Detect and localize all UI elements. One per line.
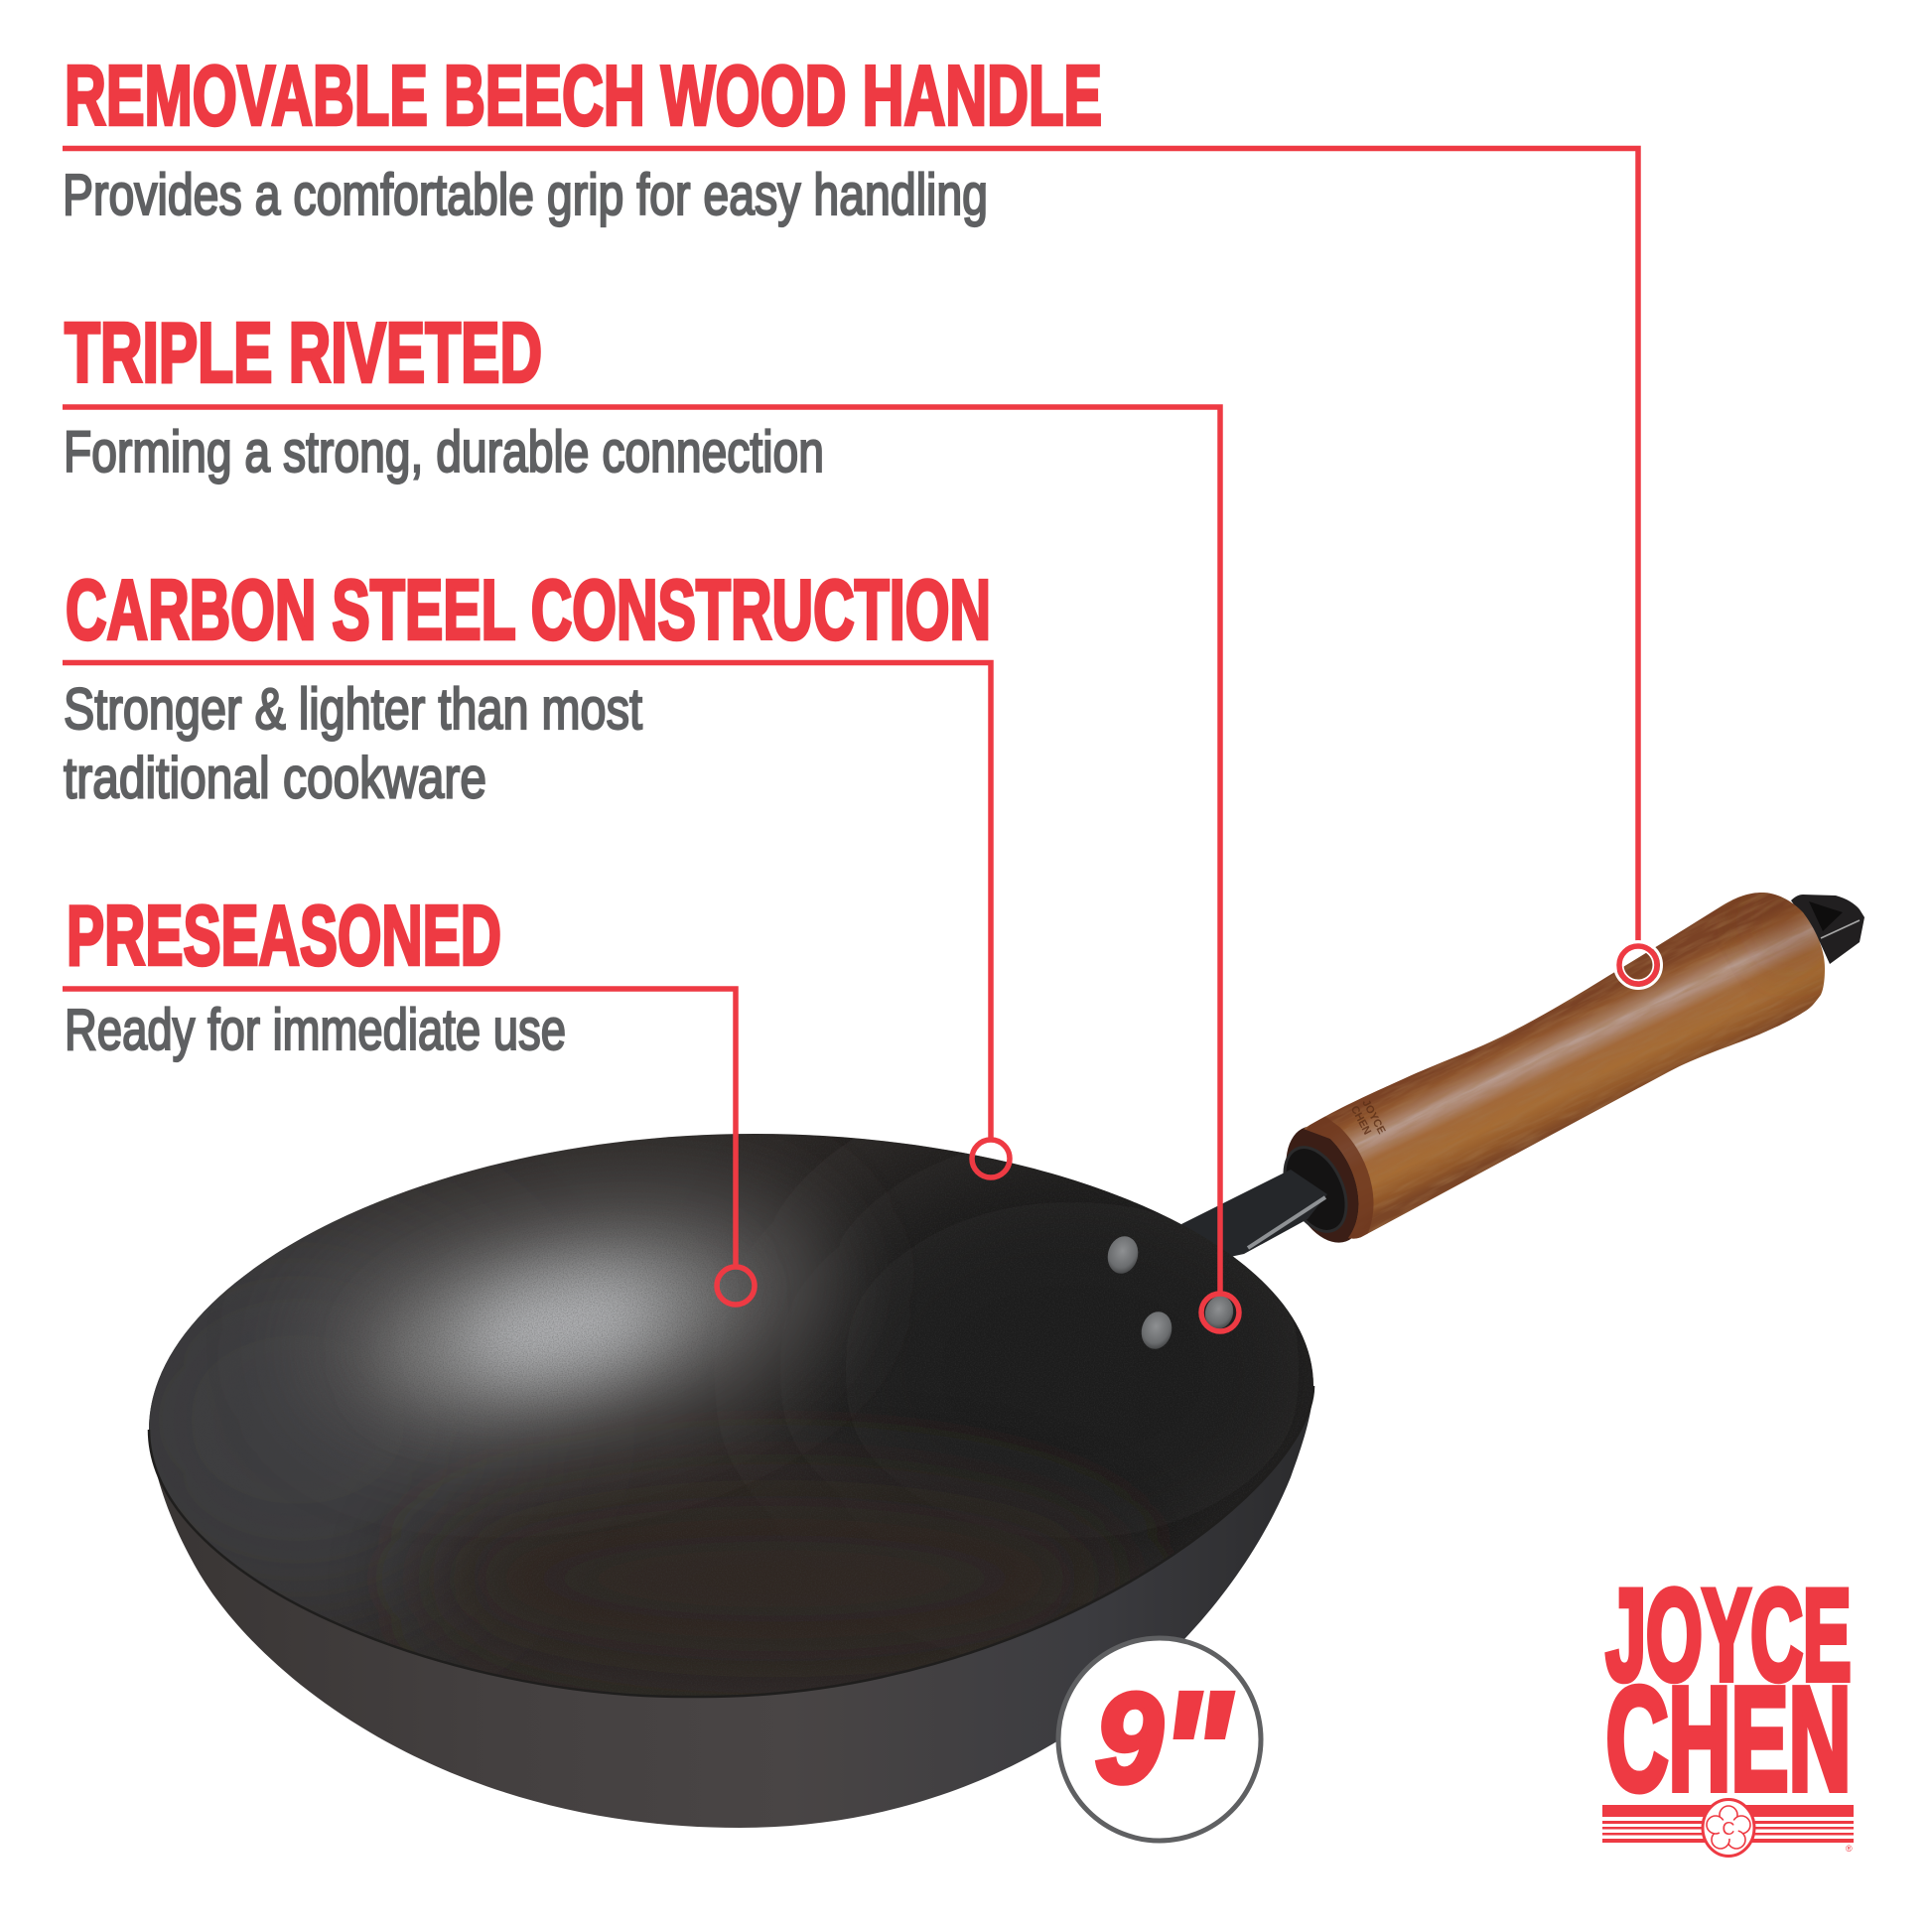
handle hanging loop — [1791, 895, 1864, 964]
callout: preseasoned — [63, 890, 755, 1305]
leader line — [63, 149, 1638, 943]
flower emblem — [1703, 1799, 1754, 1857]
size label: 9 — [1095, 1668, 1163, 1810]
leader line — [63, 989, 736, 1266]
heading: PRESEASONED — [67, 890, 501, 983]
leader line — [63, 663, 991, 1139]
flower emblem: C — [1722, 1819, 1735, 1839]
size badge — [1058, 1638, 1261, 1851]
description: traditional cookware — [64, 747, 486, 810]
description: Provides a comfortable grip for easy handling — [63, 163, 988, 227]
target ring — [1201, 1294, 1239, 1331]
callout: triple riveted — [63, 306, 1239, 1331]
description: Stronger & lighter than most — [64, 677, 642, 742]
target ring — [972, 1140, 1010, 1177]
wooden handle — [1304, 893, 1825, 1239]
target ring — [717, 1267, 755, 1305]
heading: REMOVABLE BEECH WOOD HANDLE — [65, 50, 1102, 143]
logo stripes — [1602, 1805, 1854, 1843]
size label: " — [1160, 1657, 1233, 1851]
wok rim edge — [149, 1386, 1313, 1697]
illustration: wok with handle — [147, 893, 1864, 1843]
heading: TRIPLE RIVETED — [65, 306, 542, 401]
rivets — [1104, 1233, 1237, 1352]
heading: CARBON STEEL CONSTRUCTION — [66, 564, 991, 657]
registered mark: ® — [1846, 1844, 1853, 1854]
leader line — [63, 407, 1220, 1292]
target ring — [1614, 941, 1662, 989]
wok outer body — [149, 1386, 1313, 1828]
engraved brand mark: CHEN — [1348, 1104, 1373, 1137]
wok interior — [149, 1134, 1313, 1696]
logo: Joyce Chen — [1602, 1563, 1854, 1857]
callout: carbon steel construction — [63, 564, 1010, 1177]
description: Ready for immediate use — [65, 998, 566, 1062]
callout: removable beech wood handle — [63, 50, 1662, 989]
engraved brand mark: JOYCE — [1359, 1098, 1387, 1136]
size label — [1095, 1657, 1233, 1851]
metal collar and shaft — [1181, 1115, 1380, 1261]
description: Forming a strong, durable connection — [64, 420, 824, 484]
